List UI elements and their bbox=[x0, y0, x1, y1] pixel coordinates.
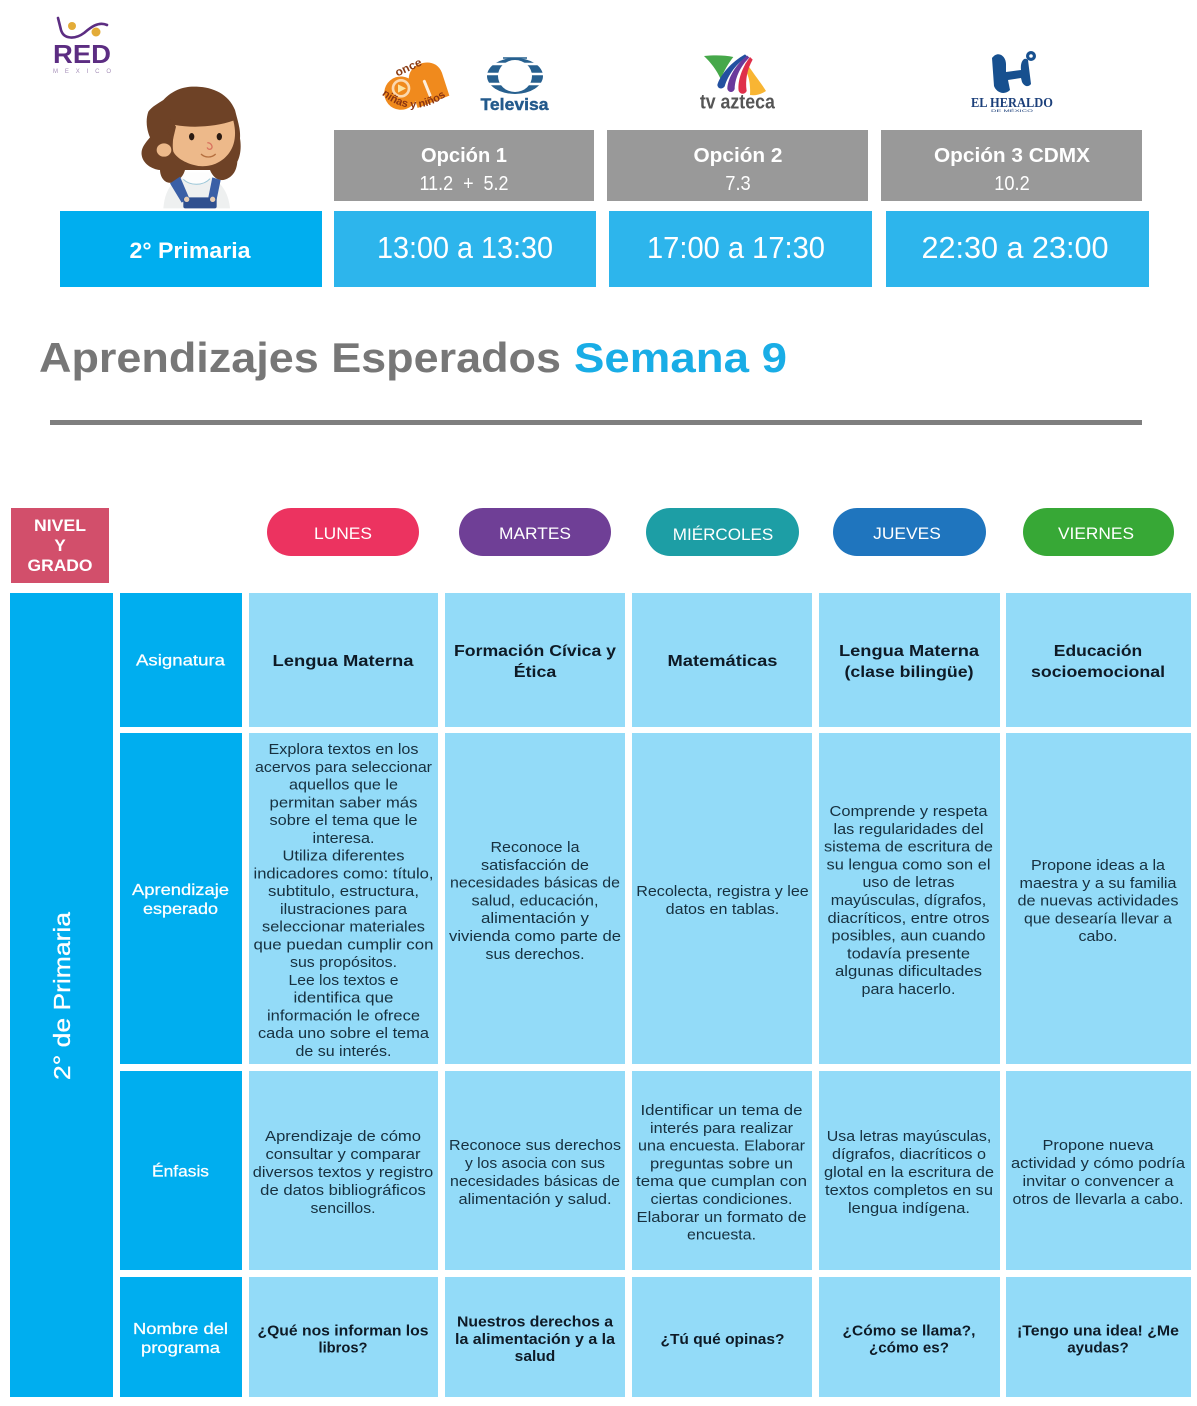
program: lunes bbox=[249, 1277, 438, 1397]
aprendizaje: lunes: Explora textos en los bbox=[268, 741, 418, 758]
aprendizaje: lunes bbox=[249, 733, 438, 1064]
heading: Nivel y Grado: NIVEL bbox=[34, 516, 86, 535]
subject: Formación Cívica y Ética: Formación Cívica y bbox=[454, 643, 616, 660]
aprendizaje: jueves: las regularidades del bbox=[834, 821, 984, 838]
aprendizaje: martes bbox=[445, 733, 625, 1064]
panel: Opción 2: 7.3 bbox=[725, 173, 751, 195]
day pill: Viernes: VIERNES bbox=[1058, 524, 1134, 543]
aprendizaje: lunes: información le ofrece bbox=[267, 1007, 420, 1024]
program: viernes bbox=[1006, 1277, 1191, 1397]
logo: Once niñas y niños: niñas y niños bbox=[382, 90, 445, 110]
aprendizaje: lunes: ilustraciones para bbox=[280, 901, 408, 918]
énfasis: martes: y los asocia con sus bbox=[465, 1155, 605, 1172]
aprendizaje: jueves: su lengua como son el bbox=[826, 856, 990, 873]
program: jueves bbox=[819, 1277, 1000, 1397]
aprendizaje: miércoles: Recolecta, registra y lee bbox=[636, 883, 809, 900]
aprendizaje: lunes: acervos para seleccionar bbox=[255, 759, 432, 776]
row: Aprendizaje esperado bbox=[120, 733, 1191, 1064]
aprendizaje: jueves: sistema de escritura de bbox=[824, 839, 993, 856]
subject: Lengua Materna: Lengua Materna bbox=[272, 653, 414, 670]
logo: Once niñas y niños bbox=[382, 57, 450, 110]
énfasis: jueves bbox=[819, 1071, 1000, 1270]
panel: Opción 2 bbox=[607, 130, 868, 201]
day pill: Jueves bbox=[833, 508, 986, 556]
énfasis: miércoles: encuesta. bbox=[687, 1227, 756, 1244]
aprendizaje: lunes: sus propósitos. bbox=[290, 954, 397, 971]
subject: Matemáticas bbox=[632, 593, 812, 727]
schedule time: option 3 bbox=[886, 211, 1149, 287]
program: lunes: libros? bbox=[318, 1340, 368, 1356]
aprendizaje: jueves: para hacerlo. bbox=[862, 981, 956, 998]
aprendizaje: viernes: maestra y a su familia bbox=[1020, 875, 1177, 892]
program: miércoles bbox=[632, 1277, 812, 1397]
row header: 2° de Primaria: 2° de Primaria bbox=[49, 912, 75, 1080]
aprendizaje: jueves: Comprende y respeta bbox=[830, 803, 988, 820]
aprendizaje: jueves bbox=[819, 733, 1000, 1064]
label: Aprendizaje esperado bbox=[120, 733, 242, 1064]
heading: Nivel y Grado: Y bbox=[54, 536, 66, 555]
logo: TV Azteca: tv azteca bbox=[700, 90, 775, 113]
aprendizaje: martes: Reconoce la bbox=[490, 839, 580, 856]
énfasis: lunes: consultar y comparar bbox=[266, 1146, 420, 1163]
logo: RED México: MEXICO bbox=[53, 69, 111, 75]
aprendizaje: jueves: mayúsculas, dígrafos, bbox=[831, 892, 986, 909]
énfasis: jueves: glotal en la escritura de bbox=[824, 1164, 994, 1181]
panel: Opción 1: Opción 1 bbox=[421, 145, 507, 167]
énfasis: viernes: actividad y cómo podría bbox=[1011, 1155, 1186, 1172]
aprendizaje: lunes: permitan saber más bbox=[270, 794, 418, 811]
aprendizaje: lunes: identifica que bbox=[294, 990, 394, 1007]
aprendizaje: jueves: algunas dificultades bbox=[835, 963, 982, 980]
aprendizaje: viernes: que desearía llevar a bbox=[1024, 910, 1173, 927]
title: Aprendizajes Esperados bbox=[39, 334, 561, 381]
day pill: Miércoles: MIÉRCOLES bbox=[673, 525, 773, 544]
label: Nombre del programa: programa bbox=[141, 1340, 220, 1357]
énfasis: miércoles bbox=[632, 1071, 812, 1270]
program: jueves: ¿cómo es? bbox=[869, 1340, 949, 1356]
énfasis: viernes bbox=[1006, 1071, 1191, 1270]
logo: El Heraldo bbox=[971, 51, 1053, 113]
day pill: Jueves: JUEVES bbox=[873, 524, 941, 543]
program: martes: salud bbox=[515, 1348, 555, 1365]
subject: Lengua Materna bilingüe: Lengua Materna bbox=[839, 643, 979, 660]
aprendizaje: viernes: Propone ideas a la bbox=[1031, 857, 1166, 874]
aprendizaje: viernes bbox=[1006, 733, 1191, 1064]
panel: Opción 2: Opción 2 bbox=[694, 145, 782, 167]
label: Énfasis bbox=[120, 1071, 242, 1270]
énfasis: viernes: invitar o convencer a bbox=[1022, 1173, 1174, 1190]
program: miércoles: ¿Tú qué opinas? bbox=[660, 1331, 784, 1348]
aprendizaje: miércoles bbox=[632, 733, 812, 1064]
énfasis: miércoles: Identificar un tema de bbox=[640, 1102, 802, 1119]
aprendizaje: lunes: de su interés. bbox=[296, 1043, 392, 1060]
panel: Opción 3 CDMX: 10.2 bbox=[994, 173, 1030, 195]
aprendizaje: lunes: interesa. bbox=[312, 830, 374, 847]
label: Asignatura: Asignatura bbox=[136, 652, 225, 670]
day pill: Lunes: LUNES bbox=[314, 524, 372, 543]
énfasis: miércoles: Elaborar un formato de bbox=[636, 1209, 806, 1226]
énfasis: lunes: diversos textos y registro bbox=[253, 1164, 433, 1181]
logo: TV Azteca bbox=[700, 54, 775, 113]
program: martes: la alimentación y a la bbox=[455, 1331, 616, 1348]
aprendizaje: lunes: sobre el tema que le bbox=[270, 812, 418, 829]
aprendizaje: lunes: cada uno sobre el tema bbox=[258, 1025, 430, 1042]
program: viernes: ¡Tengo una idea! ¿Me bbox=[1017, 1322, 1179, 1340]
panel: 2° Primaria: 2° Primaria bbox=[130, 238, 251, 263]
program: jueves: ¿Cómo se llama?, bbox=[842, 1322, 976, 1340]
aprendizaje: miércoles: datos en tablas. bbox=[666, 901, 779, 918]
énfasis: martes bbox=[445, 1071, 625, 1270]
aprendizaje: jueves: diacríticos, entre otros bbox=[828, 910, 990, 927]
subject: Formación Cívica y Ética: Ética bbox=[514, 662, 556, 681]
aprendizaje: jueves: posibles, aun cuando bbox=[832, 928, 986, 945]
énfasis: viernes: Propone nueva bbox=[1042, 1137, 1154, 1154]
title: Semana 9 bbox=[574, 334, 787, 381]
subject: Educación socioemocional: socioemocional bbox=[1031, 664, 1165, 681]
label: Aprendizaje esperado: Aprendizaje bbox=[132, 882, 229, 899]
subject: Formación Cívica y Ética bbox=[445, 593, 625, 727]
aprendizaje: lunes: indicadores como: título, bbox=[254, 865, 434, 882]
panel: Opción 3 CDMX: Opción 3 CDMX bbox=[934, 145, 1091, 167]
énfasis: martes: necesidades básicas de bbox=[450, 1173, 620, 1190]
schedule time: option 2: 17:00 a 17:30 bbox=[647, 230, 825, 265]
label: Asignatura bbox=[120, 593, 242, 727]
program: lunes: ¿Qué nos informan los bbox=[258, 1322, 428, 1340]
aprendizaje: jueves: uso de letras bbox=[862, 874, 954, 891]
label: Nombre del programa bbox=[120, 1277, 242, 1397]
subject: Educación socioemocional: Educación bbox=[1054, 643, 1142, 660]
day pill: Viernes bbox=[1023, 508, 1174, 556]
aprendizaje: lunes: que puedan cumplir con bbox=[254, 936, 434, 953]
aprendizaje: viernes: de nuevas actividades bbox=[1018, 893, 1178, 910]
énfasis: miércoles: preguntas sobre un bbox=[650, 1155, 793, 1172]
day pill: Martes: MARTES bbox=[499, 524, 571, 543]
row: Asignatura bbox=[120, 593, 1191, 727]
row: Énfasis bbox=[120, 1071, 1191, 1270]
logo: El Heraldo: EL HERALDO bbox=[971, 96, 1053, 111]
program: viernes: ayudas? bbox=[1067, 1340, 1129, 1356]
énfasis: miércoles: una encuesta. Elaborar bbox=[638, 1138, 805, 1155]
schedule time: option 1: 13:00 a 13:30 bbox=[377, 230, 553, 265]
program: martes bbox=[445, 1277, 625, 1397]
aprendizaje: martes: sus derechos. bbox=[486, 946, 584, 963]
logo: Once niñas y niños: once bbox=[394, 57, 424, 79]
énfasis: lunes: de datos bibliográficos bbox=[260, 1182, 426, 1199]
schedule time: option 2 bbox=[609, 211, 872, 287]
aprendizaje: martes: satisfacción de bbox=[481, 857, 589, 874]
program: martes: Nuestros derechos a bbox=[457, 1314, 614, 1330]
aprendizaje: martes: alimentación y bbox=[481, 910, 590, 927]
énfasis: lunes: sencillos. bbox=[310, 1200, 376, 1217]
aprendizaje: lunes: Lee los textos e bbox=[288, 972, 398, 989]
énfasis: jueves: lengua indígena. bbox=[848, 1200, 970, 1217]
aprendizaje: viernes: cabo. bbox=[1078, 928, 1118, 945]
aprendizaje: martes: salud, educación, bbox=[472, 892, 598, 909]
panel: Opción 1 bbox=[334, 130, 594, 201]
row header: 2° de Primaria bbox=[10, 593, 113, 1397]
schedule time: option 1 bbox=[334, 211, 596, 287]
aprendizaje: lunes: aquellos que le bbox=[289, 776, 398, 794]
title bbox=[39, 334, 787, 381]
logo: RED México bbox=[53, 18, 111, 75]
énfasis: miércoles: ciertas condiciones. bbox=[650, 1191, 792, 1208]
day pill: Lunes bbox=[267, 508, 419, 556]
label: Nombre del programa: Nombre del bbox=[133, 1321, 228, 1338]
subject: Lengua Materna bbox=[249, 593, 438, 727]
icon: girl character bbox=[142, 87, 241, 208]
énfasis: miércoles: interés para realizar bbox=[650, 1120, 793, 1137]
énfasis: lunes bbox=[249, 1071, 438, 1270]
logo: Televisa bbox=[480, 58, 549, 114]
day pill: Miércoles bbox=[646, 508, 799, 556]
schedule time: option 3: 22:30 a 23:00 bbox=[922, 230, 1108, 265]
logo: Televisa: Televisa bbox=[480, 95, 549, 114]
row: Nombre del programa bbox=[120, 1277, 1191, 1397]
panel: 2° Primaria bbox=[60, 211, 322, 287]
heading: Nivel y Grado bbox=[11, 508, 109, 583]
énfasis: jueves: textos completos en su bbox=[825, 1182, 993, 1199]
day pill: Martes bbox=[459, 508, 611, 556]
énfasis: lunes: Aprendizaje de cómo bbox=[265, 1128, 421, 1145]
énfasis: martes: Reconoce sus derechos bbox=[449, 1137, 621, 1154]
subject: Lengua Materna bilingüe bbox=[819, 593, 1000, 727]
énfasis: jueves: dígrafos, diacríticos o bbox=[832, 1146, 986, 1163]
panel: Opción 3 CDMX bbox=[881, 130, 1142, 201]
subject: Educación socioemocional bbox=[1006, 593, 1191, 727]
énfasis: martes: alimentación y salud. bbox=[458, 1191, 612, 1208]
aprendizaje: lunes: subtitulo, estructura, bbox=[268, 883, 419, 900]
aprendizaje: martes: necesidades básicas de bbox=[450, 875, 620, 892]
énfasis: jueves: Usa letras mayúsculas, bbox=[827, 1128, 991, 1145]
label: Aprendizaje esperado: esperado bbox=[143, 901, 218, 918]
aprendizaje: jueves: todavía presente bbox=[847, 945, 970, 962]
aprendizaje: lunes: Utiliza diferentes bbox=[282, 848, 404, 865]
label: Énfasis: Énfasis bbox=[152, 1162, 209, 1180]
logo: El Heraldo: DE MÉXICO bbox=[991, 108, 1033, 113]
aprendizaje: lunes: seleccionar materiales bbox=[262, 919, 425, 936]
aprendizaje: martes: vivienda como parte de bbox=[449, 928, 621, 945]
énfasis: viernes: otros de llevarla a cabo. bbox=[1012, 1191, 1184, 1208]
énfasis: miércoles: tema que cumplan con bbox=[636, 1173, 807, 1190]
logo: RED México: RED bbox=[53, 39, 111, 69]
subject: Matemáticas: Matemáticas bbox=[668, 653, 778, 670]
heading: Nivel y Grado: GRADO bbox=[28, 556, 92, 575]
subject: Lengua Materna bilingüe: (clase bilingüe) bbox=[844, 664, 974, 681]
panel: Opción 1: 11.2 + 5.2 bbox=[420, 173, 508, 195]
